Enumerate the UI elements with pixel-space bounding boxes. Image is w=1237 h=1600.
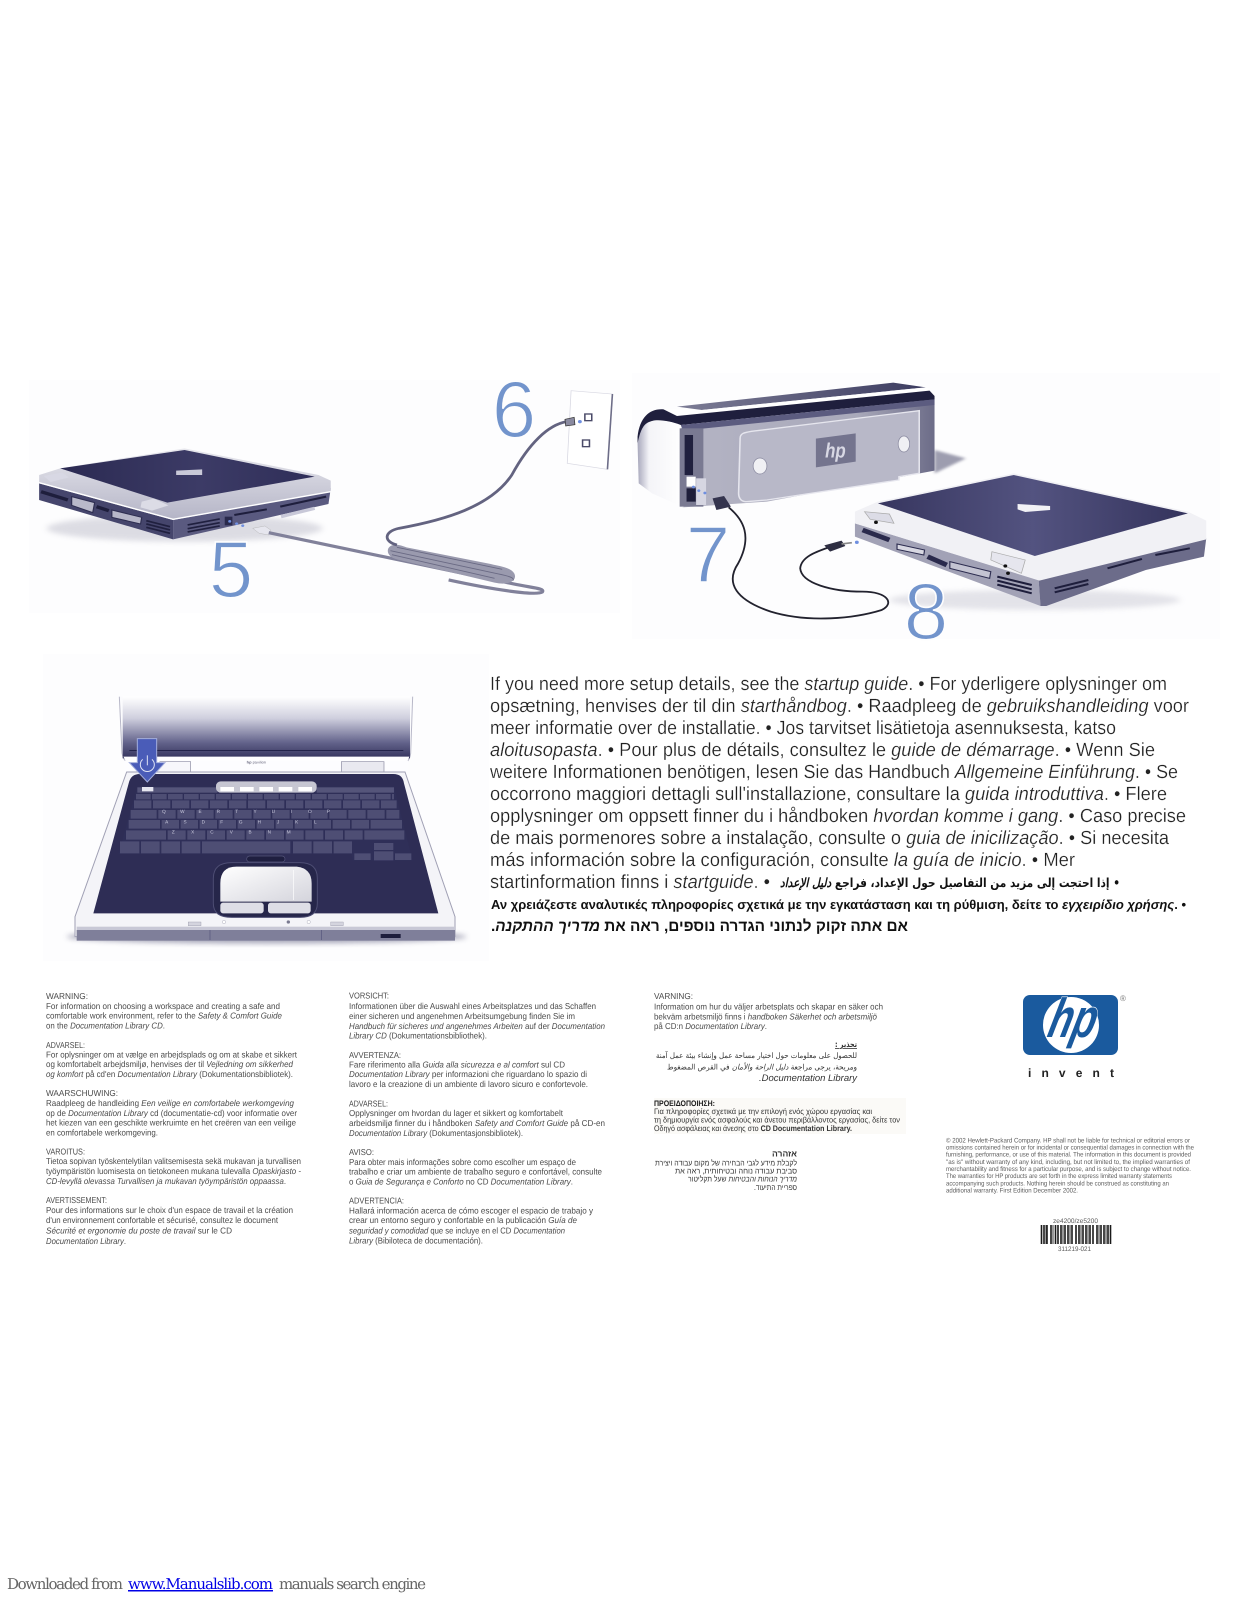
- Arabic warning: .Documentation Library: [759, 1073, 858, 1084]
- arrow: press power button: [129, 739, 165, 782]
- Hebrew warning: לקבלת מידע לגבי הבחירה של מקום עבודה ויצירת: [655, 1158, 797, 1168]
- illustration: open laptop keyboard: [67, 697, 467, 943]
- warning column 1: WARNING:: [46, 991, 88, 1001]
- warning column 2: Documentation Library (Dokumentasjonsbibliotek).: [349, 1128, 523, 1138]
- panel: open laptop with power button arrow: [43, 654, 489, 961]
- illustration: open laptop keyboard: I: [291, 809, 292, 814]
- download footer: www.Manualslib.com: [128, 1575, 273, 1593]
- warning column 1: og komfort på cd'en Documentation Library (Dokumentationsbibliotek).: [46, 1069, 293, 1079]
- Arabic warning: ومريحة، يرجى مراجعة دليل الراحة والأمان في القرص المضغوط: [667, 1062, 857, 1072]
- warning column 2: Para obter mais informações sobre como escolher um espaço de: [349, 1157, 576, 1167]
- warning column 2: VORSICHT:: [349, 990, 389, 1000]
- warning column 1: Pour des informations sur le choix d'un espace de travail et la création: [46, 1205, 293, 1215]
- step number 8: 8: [904, 567, 948, 656]
- illustration: open laptop keyboard: U: [272, 809, 275, 814]
- Hebrew warning: ספריית התיעוד.: [754, 1183, 797, 1192]
- warning column 3: VARNING:: [654, 991, 693, 1001]
- warning column 1: og komfortabelt arbejdsmiljø, henvises der til Vejledning om sikkerhed: [46, 1059, 293, 1069]
- warning column 2: einer sicheren und angenehmen Arbeitsumgebung finden Sie im: [349, 1011, 575, 1021]
- warning column 2: Fare riferimento alla Guida alla sicurezza e al comfort sul CD: [349, 1060, 565, 1070]
- warning column 1: Documentation Library.: [46, 1236, 126, 1246]
- illustration: open laptop keyboard: N: [268, 829, 271, 834]
- Hebrew sentence: אם אתה זקוק לנתוני הגדרה נוספים, ראה את מדריך ההתקנה.: [491, 918, 908, 935]
- warning column 2: ADVERTENCIA:: [349, 1196, 404, 1206]
- warning column 3: [654, 991, 906, 1192]
- copyright notice: "as is" without warranty of any kind, including, but not limited to, the implied warranties of: [946, 1159, 1190, 1166]
- barcode: ze4200/ze5200: [1053, 1218, 1098, 1225]
- main text: setup details in many languages: opsætning, henvises der til din starthåndbog. • Raadpleeg de gebruikshandleiding voor: [490, 696, 1190, 717]
- warning column 3: bekväm arbetsmiljö finns i handboken Säkerhet och arbetsmiljö: [654, 1011, 877, 1021]
- copyright notice: additional warranty. First Edition December 2002.: [946, 1188, 1078, 1194]
- illustration: printer with USB cable and laptop: hp: [825, 439, 846, 462]
- illustration: closed laptop and phone cable: [39, 391, 612, 593]
- Greek warning: [654, 1098, 906, 1134]
- warning column 1: [46, 991, 301, 1246]
- main text: setup details in many languages: occorrono maggiori dettagli sull'installazione, consultare la guida introduttiva. • Flere: [490, 784, 1167, 805]
- illustration: open laptop keyboard: M: [287, 829, 291, 834]
- warning column 2: AVISO:: [349, 1147, 374, 1157]
- warning column 1: Raadpleeg de handleiding Een veilige en comfortabele werkomgeving: [46, 1098, 294, 1108]
- main text: setup details in many languages: aloitusopasta. • Pour plus de détails, consultez le guide de démarrage. • Wenn Sie: [490, 740, 1155, 761]
- step number 7: 7: [686, 510, 730, 599]
- illustration: open laptop keyboard: hp pavilion: [247, 761, 266, 765]
- illustration: open laptop keyboard: Q: [162, 809, 166, 814]
- warning column 1: en comfortabele werkomgeving.: [46, 1128, 158, 1138]
- download footer: Downloaded from: [7, 1575, 123, 1593]
- download footer: manuals search engine: [279, 1575, 426, 1593]
- warning column 1: AVERTISSEMENT:: [46, 1195, 107, 1205]
- illustration: open laptop keyboard: B: [248, 829, 252, 834]
- warning column 1: d'un environnement confortable et sécurisé, consultez le document: [46, 1215, 279, 1225]
- panel: steps 7 and 8, printer cable: [632, 373, 1220, 656]
- warning column 2: Library (Bibiloteca de documentación).: [349, 1236, 483, 1246]
- warning column 2: o Guia de Segurança e Conforto no CD Documentation Library.: [349, 1176, 573, 1186]
- warning column 2: Informationen über die Auswahl eines Arbeitsplatzes und das Schaffen: [349, 1001, 596, 1011]
- illustration: open laptop keyboard: G: [239, 819, 242, 824]
- Greek warning: ΠΡΟΕΙΔΟΠΟΙΗΣΗ:: [654, 1099, 715, 1108]
- warning column 1: Sécurité et ergonomie du poste de travail sur le CD: [46, 1226, 232, 1236]
- illustration: open laptop keyboard: X: [191, 829, 194, 834]
- main text: setup details in many languages: [489, 674, 1190, 935]
- main text: setup details in many languages: más información sobre la configuración, consulte la guía de inicio. • Mer: [490, 850, 1076, 871]
- warning column 2: Documentation Library per informazioni che riguardano lo spazio di: [349, 1069, 587, 1079]
- warning column 1: For information on choosing a workspace and creating a safe and: [46, 1001, 280, 1011]
- logo: blue hp tile: ®: [1120, 994, 1126, 1003]
- illustration: open laptop keyboard: O: [308, 809, 312, 814]
- illustration: open laptop keyboard: P: [327, 809, 330, 814]
- warning column 2: Handbuch für sicheres und angenehmes Arbeiten auf der Documentation: [349, 1021, 605, 1031]
- copyright notice: omissions contained herein or for incidental or consequential damages in connection with the: [946, 1144, 1194, 1152]
- Arabic warning: للحصول على معلومات حول اختيار مساحة عمل وإنشاء بيئة عمل آمنة: [656, 1050, 857, 1060]
- main text: setup details in many languages: opplysninger om oppsett finner du i håndboken hvordan komme i gang. • Caso precise: [490, 806, 1186, 827]
- warning column 1: VAROITUS:: [46, 1147, 85, 1157]
- Hebrew warning: אזהרה: [772, 1148, 797, 1158]
- copyright notice: [946, 1138, 1194, 1194]
- illustration: open laptop keyboard: T: [235, 809, 238, 814]
- warning column 1: op de Documentation Library cd (documentatie-cd) voor informatie over: [46, 1108, 297, 1118]
- Greek warning: Για πληροφορίες σχετικά με την επιλογή ενός χώρου εργασίας και: [654, 1107, 872, 1116]
- illustration: open laptop keyboard: C: [210, 829, 214, 834]
- illustration: open laptop keyboard: J: [277, 819, 279, 824]
- warning column 2: ADVARSEL:: [349, 1098, 388, 1108]
- warning column 2: seguridad y comodidad que se incluye en el CD Documentation: [349, 1226, 565, 1236]
- warning column 2: crear un entorno seguro y confortable en la publicación Guía de: [349, 1215, 577, 1225]
- illustration: open laptop keyboard: W: [180, 809, 185, 814]
- illustration: open laptop keyboard: A: [165, 819, 168, 824]
- Greek warning: τη δημιουργία ενός ασφαλούς και άνετου περιβάλλοντος εργασίας, δείτε τον: [654, 1116, 900, 1124]
- main text: setup details in many languages: weitere Informationen benötigen, lesen Sie das Handbuch Allgemeine Einführung. • Se: [489, 762, 1178, 783]
- warning column 2: Opplysninger om hvordan du lager et sikkert og komfortabelt: [349, 1108, 564, 1118]
- Hebrew warning: מדריך הנוחות והבטיחות שעל תקליטור: [688, 1174, 797, 1184]
- illustration: open laptop keyboard: L: [314, 819, 317, 824]
- illustration: open laptop keyboard: V: [230, 829, 233, 834]
- copyright notice: © 2002 Hewlett-Packard Company. HP shall not be liable for technical or editorial errors or: [946, 1138, 1191, 1144]
- illustration: open laptop keyboard: Y: [253, 809, 257, 814]
- warning column 1: het kiezen van een geschikte werkruimte en het creëren van een veilige: [46, 1118, 296, 1128]
- Arabic warning: تحذير :: [835, 1040, 857, 1049]
- Greek sentence: Αν χρειάζεστε αναλυτικές πληροφορίες σχετικά με την εγκατάσταση και τη ρύθμιση, δείτε το εγχειρίδιο χρήσης. •: [491, 897, 1186, 912]
- warning column 1: on the Documentation Library CD.: [46, 1021, 165, 1031]
- warning column 1: Tietoa sopivan työskentelytilan valitsemisesta sekä mukavan ja turvallisen: [46, 1156, 301, 1166]
- copyright notice: The warranties for HP products are set forth in the express limited warranty statements: [946, 1173, 1173, 1180]
- main text: setup details in many languages: startinformation finns i startguide. •: [490, 872, 770, 893]
- warning column 2: AVVERTENZA:: [349, 1050, 401, 1060]
- warning column 1: For oplysninger om at vælge en arbejdsplads og om at skabe et sikkert: [46, 1050, 298, 1060]
- warning column 2: Hallará información acerca de cómo escoger el espacio de trabajo y: [349, 1206, 594, 1216]
- main text: setup details in many languages: meer informatie over de installatie. • Jos tarvitset lisätietoja asennuksesta, katso: [490, 718, 1116, 739]
- barcode: 311219-021: [1058, 1246, 1091, 1253]
- warning column 2: [349, 990, 605, 1246]
- main text: setup details in many languages: de mais pormenores sobre a instalação, consulte o guia de inicilização. • Si necesita: [490, 828, 1169, 849]
- download footer: [7, 1575, 426, 1593]
- warning column 1: työympäristön luomisesta on tietokoneen mukana tulevalla Opaskirjasto -: [46, 1166, 301, 1176]
- Hebrew warning: [655, 1148, 797, 1192]
- HP invent logo: [1023, 987, 1126, 1080]
- warning column 2: lavoro e la creazione di un ambiente di lavoro sicuro e confortevole.: [349, 1079, 588, 1089]
- tagline: invent: [1028, 1066, 1114, 1080]
- main text: setup details in many languages: If you need more setup details, see the startup guide. • For yderligere oplysninger om: [490, 674, 1167, 695]
- illustration: printer with USB cable and laptop: [638, 383, 1206, 619]
- illustration: open laptop keyboard: Z: [172, 829, 175, 834]
- illustration: open laptop keyboard: F: [220, 819, 223, 824]
- copyright notice: accompanying such products. Nothing herein should be construed as constituting an: [946, 1180, 1169, 1188]
- warning column 1: WAARSCHUWING:: [46, 1088, 118, 1098]
- warning column 2: trabalho e criar um ambiente de trabalho seguro e confortável, consulte: [349, 1166, 602, 1176]
- warning column 3: på CD:n Documentation Library.: [654, 1021, 767, 1031]
- illustration: open laptop keyboard: H: [258, 819, 261, 824]
- warning column 1: CD-levyllä olevassa Turvallisen ja mukavan työympäristön oppaassa.: [46, 1176, 286, 1186]
- copyright notice: furnishing, performance, or use of this material. The information in this document is provided: [946, 1152, 1191, 1158]
- illustration: open laptop keyboard: E: [198, 809, 202, 814]
- barcode: [1042, 1218, 1110, 1253]
- copyright notice: merchantability and fitness for a particular purpose, and is subject to change without notice.: [946, 1166, 1191, 1173]
- warning column 2: arbeidsmiljø finner du i håndboken Safety and Comfort Guide på CD-en: [349, 1118, 605, 1128]
- panel: steps 5 and 6, phone cable: [29, 365, 620, 614]
- logo: blue hp tile: hp: [1043, 987, 1105, 1049]
- warning column 2: Library CD (Dokumentationsbibliothek).: [349, 1030, 487, 1040]
- illustration: open laptop keyboard: K: [295, 819, 298, 824]
- Arabic sentence: • إذا احتجت إلى مزيد من التفاصيل حول الإعداد، فراجع دليل الإعداد: [780, 875, 1120, 891]
- step number 6: 6: [492, 365, 536, 454]
- warning column 1: comfortable work environment, refer to the Safety & Comfort Guide: [46, 1011, 282, 1021]
- illustration: open laptop keyboard: D: [202, 819, 205, 824]
- Greek warning: Οδηγό ασφάλειας και άνεσης στο CD Documentation Library.: [654, 1124, 852, 1133]
- warning column 3: Information om hur du väljer arbetsplats och skapar en säker och: [654, 1001, 883, 1011]
- illustration: open laptop keyboard: R: [217, 809, 220, 814]
- Arabic warning: [656, 1040, 858, 1084]
- warning column 1: ADVARSEL:: [46, 1040, 85, 1050]
- Hebrew warning: סביבת עבודה נוחה ובטיחותית, ראה את: [675, 1166, 797, 1176]
- step number 5: 5: [209, 525, 253, 614]
- illustration: open laptop keyboard: S: [183, 819, 187, 824]
